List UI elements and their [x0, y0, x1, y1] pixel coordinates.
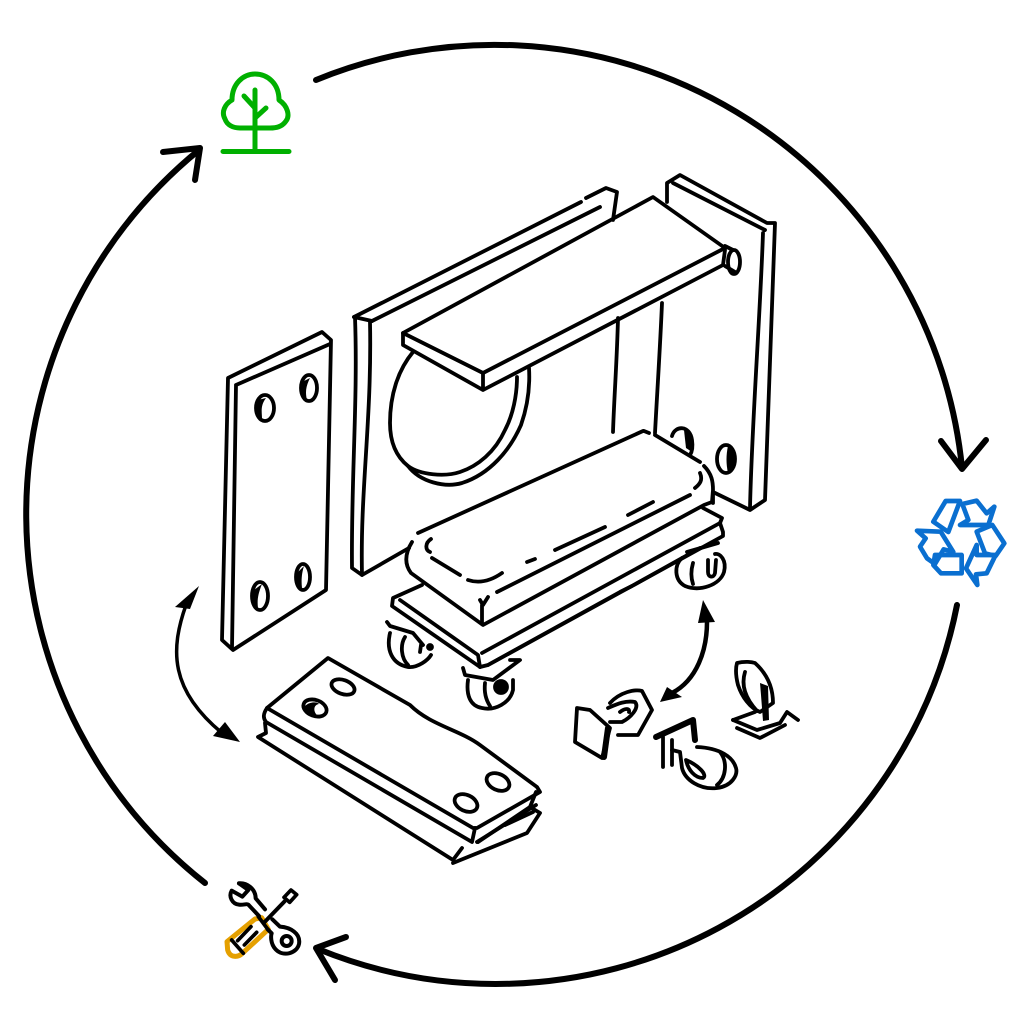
double arrow: panel swap [175, 586, 240, 742]
icon: tree [223, 74, 289, 152]
stack of flat panels [258, 658, 540, 863]
cycle arrow: recycling to repair [316, 605, 957, 984]
mounting holes [672, 428, 735, 473]
back frame panel [352, 188, 618, 575]
loose caster: plate mount [575, 690, 652, 758]
loose caster: side bracket [656, 720, 736, 788]
icon: repair tools [227, 883, 299, 956]
upper shelf board [403, 197, 740, 390]
mounting holes [252, 375, 317, 610]
panel holes [301, 676, 512, 815]
detached side panel [222, 332, 331, 650]
caster: rear right [676, 543, 725, 588]
right frame panel [655, 175, 775, 510]
icon: recycling symbol [917, 501, 1004, 585]
wheeled base board [392, 492, 723, 667]
caster: front left [387, 622, 432, 667]
cycle arrow: tree to recycling [316, 45, 986, 469]
caster: front middle [463, 660, 520, 709]
loose caster: swivel fork [733, 662, 798, 738]
cushion seat [406, 431, 713, 625]
double arrow: casters swap [660, 600, 715, 702]
round opening in back panel [390, 352, 529, 485]
screwdriver [232, 890, 297, 953]
wrench [230, 883, 299, 954]
screwdriver handle [227, 918, 268, 956]
cycle arrow: repair to tree [26, 148, 205, 883]
